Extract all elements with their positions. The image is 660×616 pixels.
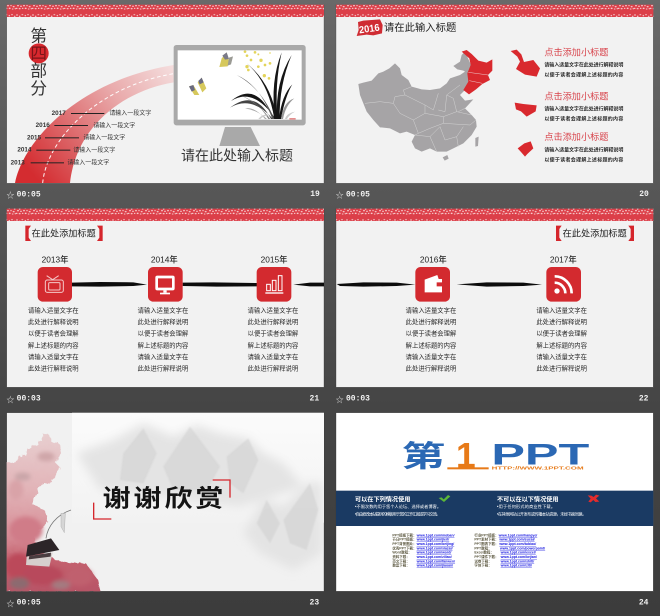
- slide number: 21: [310, 394, 319, 403]
- milestone 2015: 此处进行解释说明: [248, 364, 298, 373]
- link list left: www.1ppt.com/moban/: [416, 533, 455, 537]
- milestone 2013: 以便于读者会理解: [28, 329, 79, 338]
- prohibited uses: [497, 495, 586, 516]
- slide number: 20: [639, 190, 649, 199]
- navy usage band: [336, 491, 653, 526]
- timer: [336, 395, 370, 404]
- item 3 text: 点击添加小标题: [544, 131, 608, 142]
- icon: bar chart: [267, 276, 282, 291]
- item 2 text: [544, 91, 623, 122]
- link list left: 节日PPT模板：: [392, 537, 417, 542]
- timer: 00:03: [346, 395, 370, 404]
- allowed uses: [355, 495, 441, 516]
- slide heading with brackets: [25, 226, 103, 241]
- logo: 第: [401, 440, 445, 473]
- panel: slide 20 China map: [336, 5, 653, 200]
- link list left: www.1ppt.com/xiazai/: [416, 546, 453, 550]
- milestone 2013: [28, 254, 79, 373]
- link list left: www.1ppt.com/jieri/: [416, 538, 449, 542]
- slide number: 19: [310, 190, 320, 199]
- section heading: 第: [30, 27, 47, 46]
- logo: PPT: [491, 439, 589, 472]
- link list left: [392, 532, 455, 568]
- milestone 2016: 请输入适量文字在: [406, 352, 456, 361]
- monitor with orchid painting: [174, 45, 306, 146]
- orchid leaves: [230, 52, 295, 119]
- panel: slide 24 credits: [336, 413, 653, 607]
- link list left: 教案下载：: [392, 563, 410, 568]
- patterned header band: [336, 209, 653, 221]
- slide heading with brackets: [556, 226, 634, 241]
- logo: HTTP://WWW.1PPT.COM: [492, 465, 584, 470]
- milestone 2017: 2017年: [550, 254, 577, 264]
- link list right: 试卷下载：: [474, 558, 492, 563]
- link list left: www.1ppt.com/jiaoan/: [416, 564, 453, 568]
- link list right: PPT图表下载：: [474, 541, 499, 546]
- timer: ☆: [336, 395, 344, 404]
- link list right: www.1ppt.com/kejian/: [500, 555, 537, 559]
- timer: [6, 599, 41, 608]
- province: Liaoning: [518, 141, 533, 157]
- icon: wallet: [425, 275, 442, 292]
- timer: 00:03: [17, 395, 41, 404]
- hut and banner: [26, 510, 71, 567]
- item 3 text: [544, 131, 623, 164]
- link list left: www.1ppt.com/fanwen/: [416, 559, 455, 563]
- milestone 2015: 此处进行解释说明: [248, 317, 298, 326]
- timeline labels: 2013: [11, 160, 25, 167]
- prohibited uses: •用于任何形式的商业性下载。: [497, 503, 555, 509]
- timeline labels: [11, 109, 151, 167]
- link list left: 范文下载：: [392, 558, 410, 563]
- red corner bracket: [213, 480, 230, 498]
- patterned header band: [336, 5, 653, 17]
- brush strokes: [72, 282, 324, 287]
- section heading: [29, 27, 49, 98]
- thank-you title: 谢谢欣赏: [103, 485, 223, 512]
- prohibited uses: 不可以在以下情况使用: [497, 495, 559, 503]
- panel: slide 22 timeline part two: [336, 209, 653, 404]
- milestone 2015: 解上述标题的内容: [248, 340, 299, 349]
- link list left: PPT模板下载：: [392, 532, 417, 537]
- slide number: 23: [310, 598, 319, 607]
- butterfly upper: [219, 52, 233, 67]
- slide number: 22: [639, 394, 649, 403]
- panel: slide 19 section divider: [6, 5, 324, 200]
- panel: slide 21 timeline part one: [6, 209, 324, 404]
- milestone 2015: 请输入适量文字在: [248, 305, 298, 314]
- timer: 00:05: [17, 599, 41, 608]
- milestone 2016: 2016年: [420, 254, 447, 264]
- province: Heilongjiang: [511, 50, 540, 77]
- patterned header band: [7, 209, 324, 221]
- panel: slide 23 thank you: [4, 413, 324, 608]
- timeline labels: 2016: [36, 122, 50, 129]
- icon: rss: [555, 276, 572, 293]
- milestone 2014: 以便于读者会理解: [138, 329, 189, 338]
- link list right: www.1ppt.com/ziti/: [500, 564, 532, 568]
- milestone 2015: 请输入适量文字在: [248, 352, 298, 361]
- milestone 2017: 此处进行解释说明: [536, 364, 587, 373]
- province: Jilin: [515, 103, 537, 117]
- curved road: [15, 65, 174, 183]
- timeline labels: 2014: [17, 146, 32, 153]
- milestone 2017: 此处进行解释说明: [536, 317, 587, 326]
- allowed uses: •不限次数的用于您个人论坛、选择或者博客。: [355, 503, 441, 509]
- icon: monitor: [155, 276, 175, 294]
- link list right: PPT教程：: [474, 545, 492, 550]
- pink tree: [4, 433, 101, 592]
- prohibited uses: •在其他网站公开发布或传播本站资源，未经书面同意。: [497, 510, 586, 516]
- timeline labels: 请输入一段文字: [67, 158, 109, 166]
- link list right: www.1ppt.com/hangye/: [498, 533, 537, 537]
- timer: ☆: [336, 191, 344, 200]
- milestone 2017: 以便于读者会理解: [536, 329, 588, 338]
- item 3 text: 请输入适量文字在此处进行解释说明: [544, 146, 623, 153]
- milestone 2016: 以便于读者会理解: [406, 329, 457, 338]
- patterned header band: [7, 5, 324, 17]
- link list left: PPT背景图片：: [392, 541, 417, 546]
- milestone 2017: 解上述标题的内容: [536, 340, 588, 349]
- item 2 text: 点击添加小标题: [544, 91, 608, 102]
- icon: tv: [45, 276, 63, 292]
- item 1 text: 请输入适量文字在此处进行解释说明: [544, 62, 623, 69]
- section heading: 分: [30, 79, 47, 98]
- timer: ☆: [6, 191, 14, 200]
- link list right: 行业PPT模板：: [474, 532, 499, 537]
- timeline labels: 请输入一段文字: [73, 146, 115, 154]
- timeline labels: 2017: [52, 110, 66, 117]
- milestone 2016: [406, 254, 457, 373]
- section heading: 四: [30, 44, 47, 63]
- link list right: www.1ppt.com/tubiao/: [498, 542, 536, 546]
- milestone 2016: 此处进行解释说明: [406, 364, 456, 373]
- timer: [6, 190, 41, 200]
- link list right: www.1ppt.com/excel/: [500, 551, 536, 555]
- link list right: 字体下载：: [474, 563, 492, 568]
- monitor title: 请在此处输入标题: [181, 147, 293, 163]
- slide number: 24: [639, 598, 649, 607]
- brush strokes: [337, 282, 542, 287]
- milestone 2016: 此处进行解释说明: [406, 317, 456, 326]
- milestone 2013: 请输入适量文字在: [28, 352, 79, 361]
- milestone 2014: 请输入适量文字在: [138, 305, 188, 314]
- link list right: www.1ppt.com/shiti/: [500, 559, 534, 563]
- item 1 text: 点击添加小标题: [544, 46, 608, 57]
- ink landscape: [4, 413, 324, 592]
- map of China: [358, 50, 492, 161]
- allowed uses: •自由修改本站提供的模板用于您的工作汇报或学习交流。: [355, 510, 440, 516]
- milestone 2014: 2014年: [151, 254, 178, 264]
- slide heading with brackets: 在此处添加标题: [563, 227, 627, 238]
- timeline labels: 请输入一段文字: [109, 109, 151, 117]
- icon: red cross: [588, 495, 599, 502]
- milestone 2014: 解上述标题的内容: [138, 340, 189, 349]
- milestone 2014: [138, 254, 189, 373]
- slide heading with brackets: 在此处添加标题: [32, 227, 96, 238]
- red corner bracket: [94, 503, 111, 519]
- milestone 2017: 请输入适量文字在: [536, 352, 587, 361]
- milestone 2014: 此处进行解释说明: [138, 364, 188, 373]
- section heading: 部: [30, 62, 47, 81]
- timer: [336, 190, 370, 200]
- logo: [401, 436, 589, 475]
- milestone 2013: 2013年: [42, 254, 68, 264]
- milestone 2015: 以便于读者会理解: [248, 329, 299, 338]
- item 1 text: 以便于读者会理解上述标题的内容: [544, 72, 623, 79]
- link list right: PPT课件下载：: [474, 554, 499, 559]
- link list right: PPT素材下载：: [474, 537, 499, 542]
- icon: green check: [439, 495, 450, 502]
- item 3 text: 以便于读者会理解上述标题的内容: [544, 157, 623, 164]
- milestone 2017: [536, 254, 588, 373]
- timeline labels: 请输入一段文字: [93, 121, 135, 129]
- timer: ☆: [6, 599, 14, 608]
- link list right: www.1ppt.com/sucai/: [498, 538, 535, 542]
- timer: [6, 395, 41, 404]
- milestone 2015: [248, 254, 299, 373]
- logo: 1: [456, 436, 476, 475]
- link list left: 优秀PPT下载：: [392, 545, 417, 550]
- item 1 text: [544, 46, 623, 79]
- milestone 2016: 请输入适量文字在: [406, 305, 456, 314]
- link list right: www.1ppt.com/powerpoint/: [499, 546, 545, 550]
- link list left: 资料下载：: [392, 554, 410, 559]
- milestone 2014: 请输入适量文字在: [138, 352, 188, 361]
- butterfly lower: [189, 78, 206, 95]
- slide title: 请在此输入标题: [384, 21, 456, 34]
- link list left: www.1ppt.com/beijing/: [416, 542, 454, 546]
- timeline labels: 请输入一段文字: [83, 133, 125, 141]
- orchid flowers: [244, 50, 271, 80]
- milestone 2017: 请输入适量文字在: [536, 305, 587, 314]
- milestone 2013: 此处进行解释说明: [28, 364, 79, 373]
- link list left: www.1ppt.com/ziliao/: [416, 555, 452, 559]
- timer: 00:05: [346, 190, 370, 199]
- timer: ☆: [6, 395, 14, 404]
- title stamp: 2016: [358, 23, 381, 36]
- link list left: Word教程：: [392, 550, 412, 555]
- milestone 2014: 此处进行解释说明: [138, 317, 188, 326]
- item 2 text: 以便于读者会理解上述标题的内容: [544, 115, 623, 122]
- milestone 2013: 请输入适量文字在: [28, 305, 79, 314]
- allowed uses: 可以在下列情况使用: [355, 495, 410, 503]
- link list left: www.1ppt.com/word/: [416, 551, 451, 555]
- milestone 2016: 解上述标题的内容: [406, 340, 457, 349]
- milestone 2013: 解上述标题的内容: [28, 340, 79, 349]
- milestone 2013: 此处进行解释说明: [28, 317, 79, 326]
- link list right: Excel教程：: [474, 550, 494, 555]
- milestone 2015: 2015年: [261, 254, 287, 264]
- timer: 00:05: [17, 190, 41, 199]
- timeline labels: 2015: [27, 134, 42, 141]
- link list right: [474, 532, 545, 568]
- item 2 text: 请输入适量文字在此处进行解释说明: [544, 106, 623, 113]
